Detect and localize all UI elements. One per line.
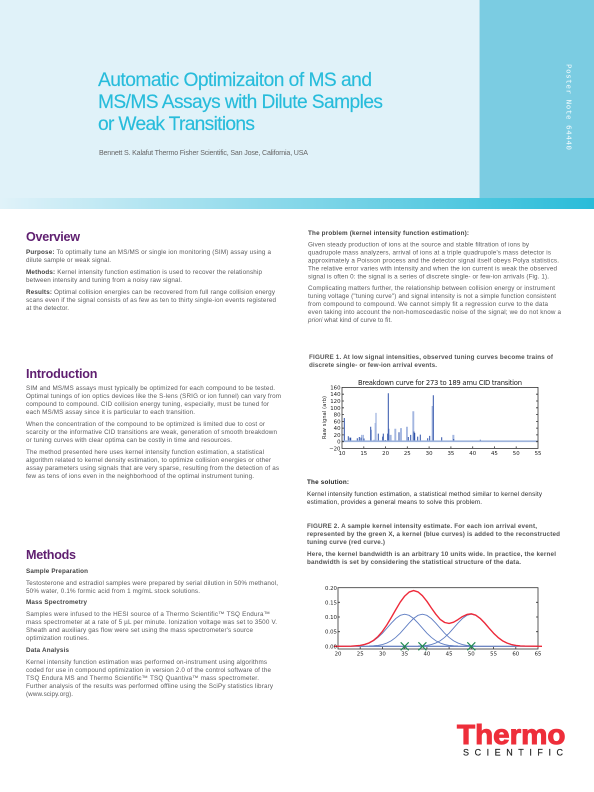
dark spikes [344, 393, 480, 442]
text: problem paragraph 2: priori what kind of curve to fit. [307, 317, 392, 324]
text: data analysis [26, 659, 274, 698]
logo: Thermo Scientific: SCIENTIFIC [463, 748, 564, 758]
figure 1 caption: discrete single- or few-ion arrival events. [309, 362, 437, 369]
text: sample preparation: 50% water, 0.1% formic acid from 1 mg/mL stock solutions. [26, 588, 200, 595]
text: mass spectrometry [26, 611, 277, 642]
blue kernel curves [351, 614, 525, 646]
sidebar: poster note tab [479, 0, 594, 198]
y tick labels: 40 [334, 426, 341, 432]
y tick labels: 160 [330, 385, 341, 391]
subheading: data analysis: Data Analysis [26, 647, 69, 654]
y tick labels [329, 385, 341, 452]
title: or Weak Transitions [98, 114, 255, 135]
zero baseline band [342, 440, 538, 442]
poster note number: Poster Note 64440 [565, 64, 574, 150]
x tick labels: 25 [404, 451, 411, 457]
text: introduction paragraph 1: SIM and MS/MS assays must typically be optimized for each compound to be tested. [26, 385, 275, 392]
text: overview methods: Methods: Kernel intensity function estimation is used to recover the relationship [26, 269, 262, 276]
text: introduction paragraph 1: Optimal tunings of ion optics devices like the S-lens (SRIG or ion funnel) can vary from [26, 393, 281, 400]
text: introduction paragraph 3: assay parameters using signals that are very sparse, resulting from the detection of as [26, 465, 279, 472]
x tick labels: 40 [423, 652, 431, 658]
x tick labels: 45 [446, 652, 453, 658]
text: introduction paragraph 2 [26, 421, 277, 444]
y tick labels: −20 [329, 446, 341, 452]
figure 2 caption: bandwidth is set by considering the statistical structure of the data. [307, 559, 521, 566]
text: sample preparation [26, 580, 278, 595]
x tick labels: 15 [360, 451, 367, 457]
text: introduction paragraph 2: or tuning curves with clear optima can be costly in time and resources. [26, 437, 232, 444]
text: the solution [307, 491, 543, 506]
y tick labels: 120 [330, 399, 341, 405]
x tick labels [335, 652, 541, 658]
text: overview results: at the detector. [26, 305, 69, 312]
text: overview results: Results: Optimal collision energies can be recovered from full range collision energy [26, 289, 276, 296]
light spikes [362, 406, 454, 442]
y tick labels: 140 [330, 392, 341, 398]
chart: kernel intensity estimate [325, 586, 542, 658]
title: Automatic Optimizaiton of MS and [98, 70, 372, 91]
subheading: sample preparation: Sample Preparation [26, 568, 88, 575]
author line: Bennett S. Kalafut Thermo Fisher Scientific, San Jose, California, USA [99, 149, 308, 157]
y tick labels: 20 [334, 433, 341, 439]
text: overview methods: between intensity and tuning from a noisy raw signal. [26, 277, 182, 284]
text: mass spectrometry: mass spectrometer at a rate of 5 µL per minute. Ionization voltage was set to 3500 V. [26, 619, 277, 626]
text: overview results [26, 289, 276, 312]
text: mass spectrometry: Sheath and auxiliary gas flow were set using the mass spectrometer's source [26, 627, 253, 634]
logo: Thermo Scientific: Thermo [457, 719, 566, 750]
text: data analysis: (www.scipy.org). [26, 691, 73, 698]
chart title: Breakdown curve for 273 to 189 amu CID transition [358, 379, 522, 387]
text: problem paragraph 2 [307, 285, 561, 324]
text: problem paragraph 2: from compound to compound. We cannot simply fit a regression curve to the data [308, 301, 548, 308]
heading: Overview: Overview [26, 230, 80, 244]
header banner [0, 0, 594, 209]
x tick labels: 55 [535, 451, 541, 457]
y tick labels: 100 [330, 406, 341, 412]
text: problem paragraph 1: signal is often 0: the signal is a series of discrete single- or few-ion arrivals (Fig. 1). [308, 274, 549, 280]
heading: Methods: Methods [26, 548, 76, 562]
heading: Introduction: Introduction [26, 367, 98, 381]
text: introduction paragraph 3: algorithm related to kernel density estimation, to optimize collision energies or other [26, 457, 271, 464]
figure 1 caption [309, 354, 554, 369]
x tick labels [339, 451, 541, 457]
text: problem paragraph 2: even taking into account the non-homoscedastic noise of the signal; we do not know a [308, 309, 561, 316]
text: mass spectrometry: optimization routines. [26, 635, 89, 642]
text: overview methods [26, 269, 262, 284]
figure 1 caption: FIGURE 1. At low signal intensities, observed tuning curves become trains of [309, 354, 554, 361]
text: sample preparation: Testosterone and estradiol samples were prepared by serial dilution in 50% methanol, [26, 580, 278, 587]
subheading: mass spectrometry: Mass Spectrometry [26, 599, 87, 606]
y tick labels: 0.00 [325, 644, 338, 650]
text: problem paragraph 2: tuning voltage ("tuning curve") and signal intensity is not a simple function consistent [308, 293, 556, 300]
x tick labels: 45 [491, 451, 498, 457]
y axis label: Raw signal (arb) [322, 396, 328, 439]
text: introduction paragraph 1: compound to compound. CID collision energy tuning, especially, must be tuned for [26, 401, 269, 408]
x tick labels: 35 [447, 451, 454, 457]
text: introduction paragraph 3 [26, 449, 279, 480]
y tick labels: 80 [334, 413, 341, 419]
subheading: the problem: The problem (kernel intensity function estimation): [308, 230, 469, 237]
text: problem paragraph 1: quadrupole mass analyzers, arrival of ions at a triple quadrupole's mass detector is [308, 250, 551, 256]
text: the solution: Kernel intensity function estimation, a statistical method similar to kernel density [307, 491, 543, 498]
text: introduction paragraph 3: few as tens of ions even in the neighborhood of the optimal instrument tuning. [26, 473, 254, 480]
title: MS/MS Assays with Dilute Samples [98, 92, 383, 113]
blue baseline [338, 645, 538, 647]
text: overview purpose: dilute sample or weak signal. [26, 257, 111, 264]
text: problem paragraph 1: Given steady production of ions at the source and stable filtration of ions by [308, 242, 530, 248]
chart: breakdown curve [322, 379, 541, 457]
x tick labels: 60 [512, 652, 520, 658]
x tick labels: 10 [339, 451, 346, 457]
y tick labels [325, 586, 338, 650]
text: data analysis: TSQ Endura MS and Thermo Scientific™ TSQ Quantiva™ mass spectrometer. [26, 675, 259, 682]
text: problem paragraph 1: The relative error varies with intensity and when the ion current is weak the observed [308, 266, 557, 272]
x tick labels: 20 [335, 652, 342, 658]
text: introduction paragraph 2: scarcity or the informative CID transitions are weak, generation of smooth breakdown [26, 429, 277, 436]
text: data analysis: Kernel intensity function estimation was performed on-instrument using algorithms [26, 659, 267, 666]
text: introduction paragraph 3: The method presented here uses kernel intensity function estimation, a statistical [26, 449, 264, 456]
figure 2 caption: tuning curve (red curve.) [307, 539, 385, 546]
figure 2 caption: FIGURE 2. A sample kernel intensity estimate. For each ion arrival event, [307, 523, 537, 530]
x tick labels: 35 [401, 652, 408, 658]
x tick labels: 50 [468, 652, 475, 658]
y tick labels: 0.05 [325, 630, 337, 636]
y tick labels: 0.15 [325, 600, 337, 606]
y tick labels: 0.10 [325, 615, 338, 621]
x tick labels: 40 [469, 451, 477, 457]
text: mass spectrometry: Samples were infused to the HESI source of a Thermo Scientific™ TSQ Endura™ [26, 611, 270, 618]
text: data analysis: Further analysis of the results was performed offline using the SciPy statistics library [26, 683, 274, 690]
plot frame and ticks [342, 387, 538, 448]
text: introduction paragraph 1 [26, 385, 281, 416]
text: overview results: scans even if the signal consists of as few as ten to thirty single-ion events registered [26, 297, 276, 304]
green X markers [401, 642, 475, 650]
title [98, 70, 383, 135]
figure 2 caption: Here, the kernel bandwidth is an arbitrary 10 units wide. In practice, the kernel [307, 551, 556, 558]
text: problem paragraph 2: Complicating matters further, the relationship between collision energy or instrument [308, 285, 555, 292]
red tuning curve [334, 591, 542, 646]
x tick labels: 25 [357, 652, 364, 658]
x tick labels: 30 [379, 652, 386, 658]
text: overview purpose: Purpose: To optimally tune an MS/MS or single ion monitoring (SIM) assay using a [26, 249, 271, 256]
text: introduction paragraph 1: each MS/MS assay since it is particular to each transition. [26, 409, 195, 416]
figure 2 caption [307, 523, 560, 566]
y tick labels: 0.20 [325, 586, 338, 592]
x tick labels: 55 [490, 652, 497, 658]
text: problem paragraph 1 [308, 242, 559, 280]
subheading: the solution: The solution: [307, 479, 349, 486]
x tick labels: 65 [535, 652, 541, 658]
gradient band [0, 198, 594, 209]
y tick labels: 60 [334, 419, 341, 425]
x tick labels: 50 [513, 451, 520, 457]
x tick labels: 30 [426, 451, 433, 457]
text: problem paragraph 1: approximately a Poisson process and the detector signal itself obeys Polya statistics. [308, 258, 559, 264]
text: the solution: estimation, provides a general means to solve this problem. [307, 499, 482, 506]
figure 2 caption: represented by the green X, a kernel (blue curves) is added to the reconstructed [307, 531, 560, 538]
text: overview purpose [26, 249, 271, 264]
text: introduction paragraph 2: When the concentration of the compound to be optimized is limited due to cost or [26, 421, 265, 428]
x tick labels: 20 [382, 451, 390, 457]
y tick labels: 0 [337, 440, 341, 446]
plot frame and ticks [338, 588, 538, 649]
text: data analysis: coded for use in compound optimization in version 2.0 of the control software of the [26, 667, 271, 674]
